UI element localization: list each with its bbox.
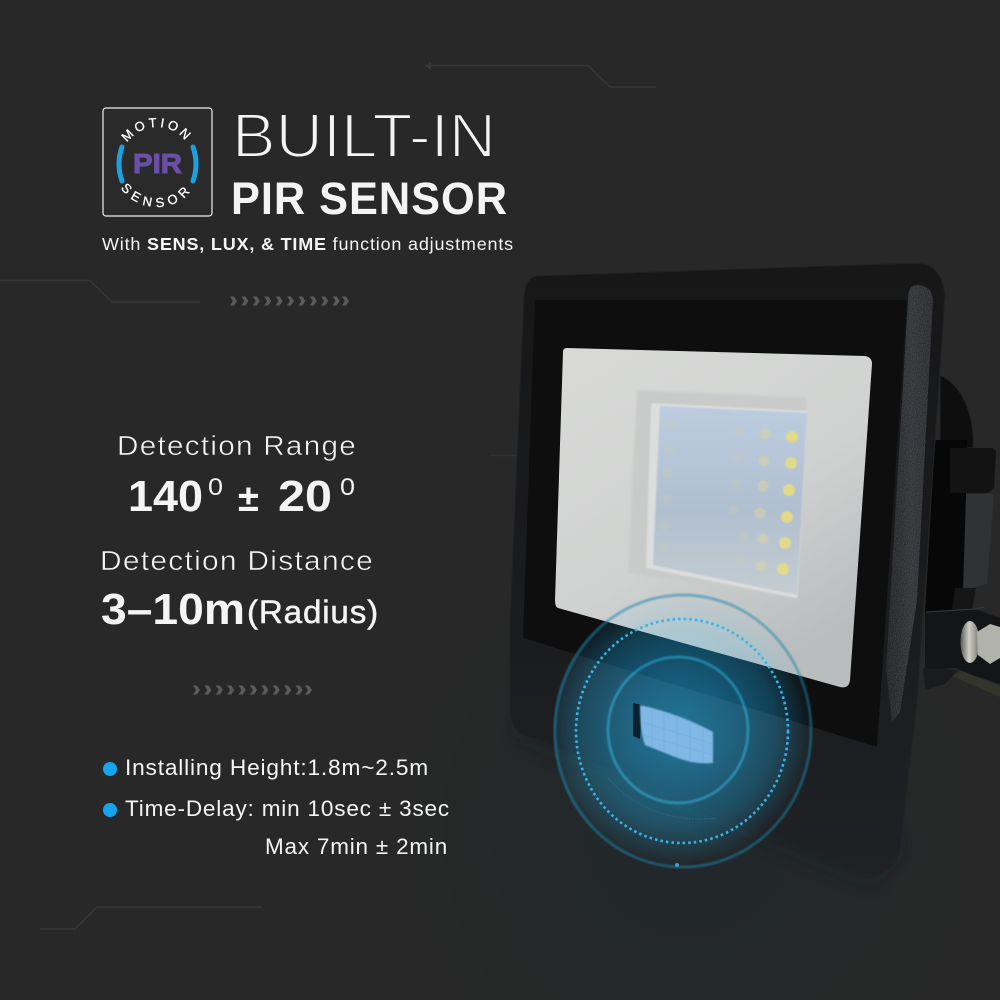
pivot arc [940, 375, 973, 448]
detection range label: Detection Range [117, 430, 357, 461]
title [231, 102, 508, 224]
spec: time delay min: Time-Delay: min 10sec ± 3sec [125, 796, 450, 821]
arc label: sensor: SENSOR [122, 184, 190, 208]
detection range value: 20 [278, 472, 332, 521]
detection distance value: 3–10m [101, 585, 245, 634]
black body [925, 440, 967, 612]
logo: motion PIR sensor badge [102, 107, 213, 217]
detection range value: 0 [340, 474, 355, 501]
detection range value: 0 [208, 474, 223, 501]
chevron divider top [230, 296, 349, 306]
collar [950, 448, 996, 493]
arc label: motion: MOTION [121, 118, 191, 142]
white diffuser panel [555, 348, 872, 687]
LED window [653, 406, 807, 595]
housing body [510, 263, 945, 875]
LED recess [628, 390, 807, 598]
brackets [119, 147, 196, 181]
drop shadow [520, 700, 900, 880]
detection range value: ± [238, 478, 259, 520]
detection distance label: Detection Distance [100, 545, 374, 576]
LED dots [658, 420, 798, 575]
title line: built-in: BUILT-IN [232, 102, 496, 171]
detection distance value [101, 585, 379, 634]
detection range value [128, 472, 355, 521]
motion rings [555, 595, 811, 867]
title line: PIR sensor: PIR SENSOR [231, 173, 508, 224]
detection distance value: (Radius) [247, 594, 379, 630]
bracket arm [925, 609, 1000, 684]
decorative circuit lines [0, 62, 656, 929]
floodlight product [510, 263, 1000, 880]
sensor glow [553, 594, 809, 868]
chevron divider bottom [193, 686, 312, 694]
inner frame [523, 300, 907, 747]
rear mount [923, 375, 1000, 697]
spec: time delay max: Max 7min ± 2min [265, 834, 448, 859]
PIR sensor window [633, 703, 713, 763]
PIR mark: PIR [133, 148, 182, 179]
spec list [103, 755, 450, 859]
textured side band [886, 285, 933, 722]
threads [952, 588, 976, 610]
detection range value: 140 [128, 472, 203, 521]
bullet: time delay [103, 803, 117, 817]
grey block [963, 494, 994, 590]
spec: installing height: Installing Height:1.8m~2.5m [125, 755, 429, 780]
bolt [960, 621, 1000, 664]
bullet: installing height [103, 762, 117, 776]
subtitle: With SENS, LUX, & TIME function adjustments [102, 234, 514, 254]
